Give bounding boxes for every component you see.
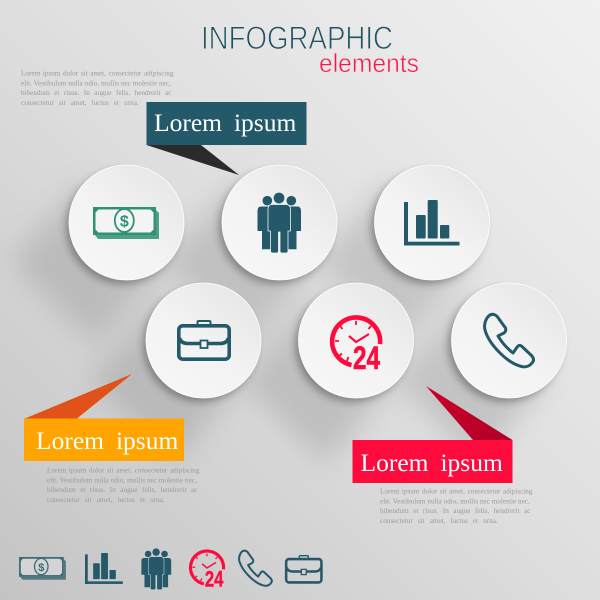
text block: lower right: elit. Vestibulum nulla odio, mollis nec molestie nec,	[380, 498, 530, 506]
panel: people disc	[222, 165, 337, 280]
icon: group of people	[258, 193, 301, 253]
callout: red	[352, 386, 512, 483]
icon: 24 hour clock	[332, 317, 380, 376]
icon: small 24 hour clock	[190, 551, 224, 592]
icon: briefcase	[179, 321, 229, 359]
text block: lower left: elit. Vestibulum nulla odio, mollis nec molestie nec,	[47, 476, 197, 484]
subtitle: elements	[319, 48, 419, 78]
text block: lower left: Lorem ipsum dolor sit amet, consectetur adipiscing	[47, 466, 200, 474]
panel: phone disc	[452, 283, 566, 398]
icon: small bar chart	[85, 553, 123, 584]
text block: lower right: Lorem ipsum dolor sit amet, consectetur adipiscing	[380, 488, 533, 496]
panel: chart disc	[374, 165, 490, 280]
title: INFOGRAPHIC	[201, 20, 393, 56]
icon: banknotes	[93, 207, 159, 239]
text block: top left: consectetur sit amet, luctus et urna.	[21, 99, 139, 107]
icon: bar chart	[404, 200, 460, 246]
callout: red: Lorem ipsum	[360, 448, 503, 477]
text block: top left	[21, 70, 174, 107]
icon: phone handset	[485, 314, 534, 367]
text block: lower right	[380, 488, 533, 525]
panel: briefcase disc	[146, 283, 261, 398]
text block: lower right: bibendum et risus. In augue felis, hendrerit ac	[380, 507, 530, 515]
text block: lower left	[47, 466, 200, 504]
title	[201, 20, 419, 78]
text block: lower left: bibendum et risus. In augue felis, hendrerit ac	[47, 486, 197, 494]
panel: money disc	[69, 165, 184, 280]
callout: teal	[146, 102, 306, 175]
callout: orange	[24, 374, 184, 461]
icon row	[19, 548, 321, 592]
text block: top left: bibendum et risus. In augue felis, hendrerit ac	[21, 89, 171, 97]
text block: top left: elit. Vestibulum nulla odio, mollis nec molestie nec,	[21, 80, 171, 88]
panel: clock disc	[298, 283, 414, 398]
icon: small banknotes	[19, 557, 66, 580]
disc shadows	[12, 170, 562, 463]
callout: orange: Lorem ipsum	[36, 426, 178, 455]
icon: small briefcase	[286, 556, 321, 582]
icon: small people	[141, 548, 171, 590]
icon: small phone	[239, 551, 272, 586]
text block: lower right: consectetur sit amet, luctus et urna.	[380, 517, 498, 525]
text block: top left: Lorem ipsum dolor sit amet, consectetur adipiscing	[21, 70, 174, 78]
callout: teal: Lorem ipsum	[154, 108, 296, 137]
text block: lower left: consectetur sit amet, luctus et urna.	[47, 496, 165, 504]
